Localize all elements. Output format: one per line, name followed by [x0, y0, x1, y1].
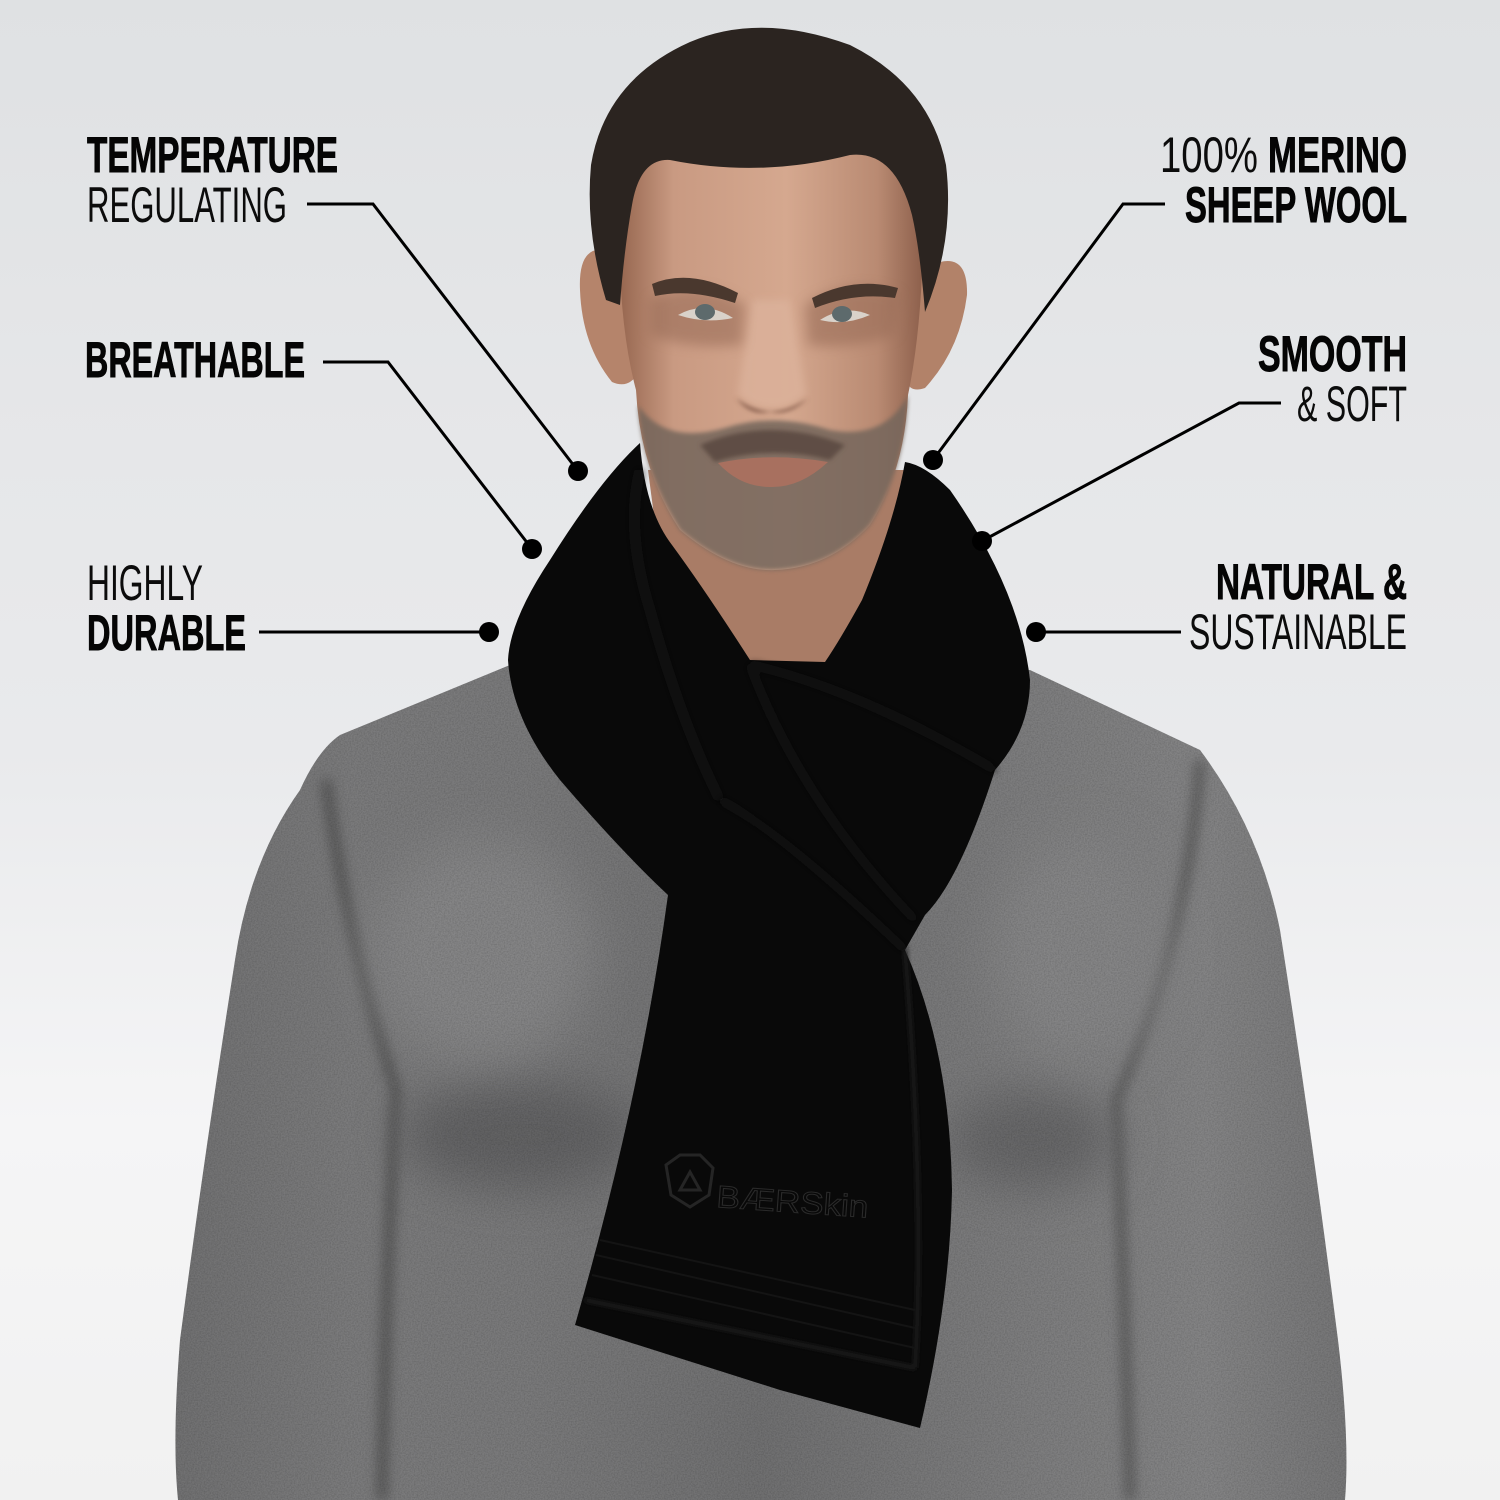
callout: 100% merino sheep wool: MERINO — [1268, 127, 1407, 183]
mouth — [718, 457, 828, 487]
nose — [736, 300, 808, 413]
callout: breathable — [85, 332, 542, 559]
callout: natural and sustainable — [1026, 554, 1407, 660]
callout: natural and sustainable: NATURAL & — [1216, 554, 1407, 610]
neck — [648, 470, 904, 668]
callout: temperature regulating: REGULATING — [87, 177, 287, 233]
callout: highly durable — [87, 555, 499, 661]
callout: highly durable: HIGHLY — [87, 555, 203, 611]
callout: 100% merino sheep wool: 100% — [1160, 127, 1258, 183]
ears — [580, 250, 967, 390]
callout: temperature regulating — [87, 127, 588, 481]
hair — [590, 28, 948, 312]
callout: highly durable: DURABLE — [87, 605, 246, 661]
callout: temperature regulating: TEMPERATURE — [87, 127, 338, 183]
scarf logo — [666, 1155, 870, 1225]
photo: model wearing scarf — [170, 28, 1350, 1500]
black scarf — [508, 443, 1030, 1428]
scarf ribbing — [592, 1240, 915, 1348]
callout: smooth and soft: SMOOTH — [1258, 326, 1407, 382]
scarf logo: BÆRSkin — [716, 1179, 870, 1225]
grey long-sleeve top — [170, 660, 1350, 1500]
callout: breathable: BREATHABLE — [85, 332, 305, 388]
beard stubble — [638, 395, 908, 570]
face — [619, 140, 923, 570]
callout: smooth and soft — [972, 326, 1407, 551]
callout: smooth and soft: & SOFT — [1297, 376, 1407, 432]
eyes and brows — [650, 278, 900, 346]
moustache — [700, 430, 845, 462]
callout: 100% merino sheep wool — [923, 127, 1407, 470]
